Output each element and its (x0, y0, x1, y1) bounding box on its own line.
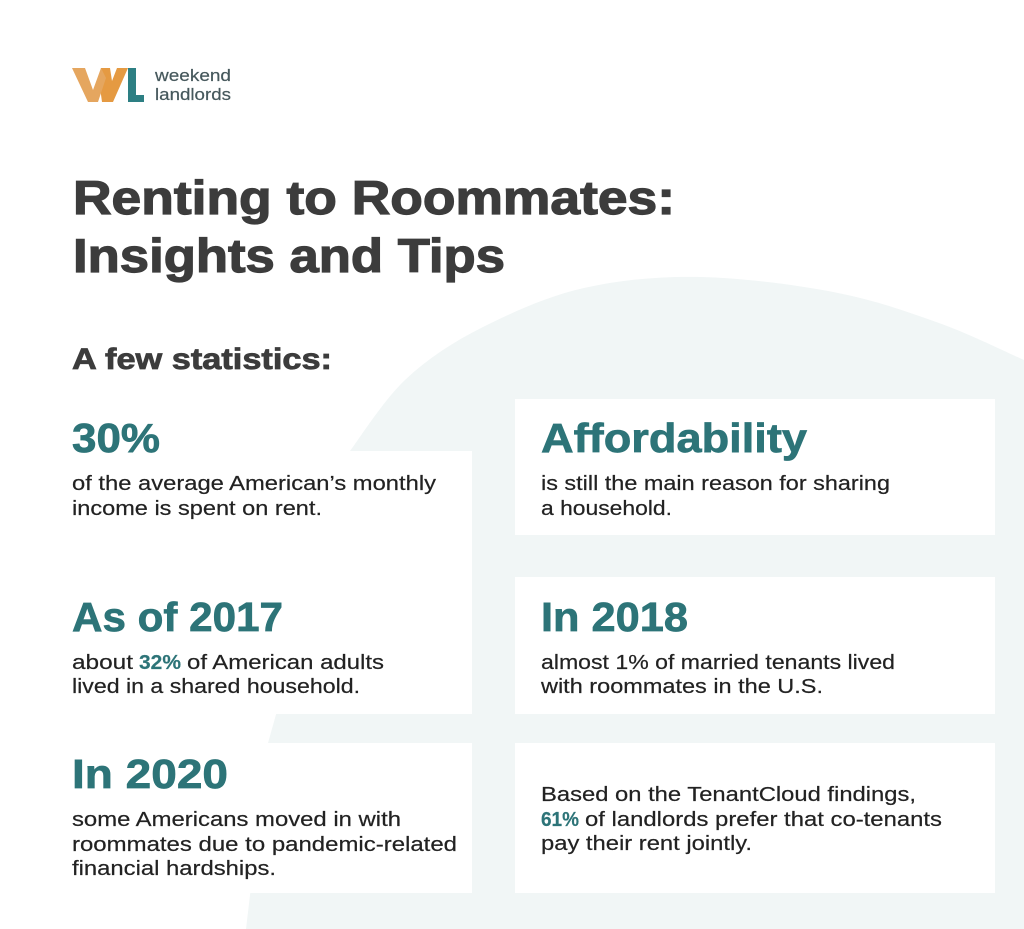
panel: as of 2017: about (72, 651, 133, 674)
logo (72, 67, 231, 104)
panel: 30% of income (0, 415, 472, 714)
background blob (246, 277, 1024, 929)
panel: tenantcloud findings: of landlords prefer that co-tenants (585, 808, 942, 831)
panel: as of 2017: As of 2017 (72, 594, 283, 640)
panel: 30% of income: income is spent on rent. (72, 497, 322, 520)
panel: in 2020: financial hardships. (72, 857, 276, 880)
panel: affordability: Affordability (541, 415, 807, 461)
panel: affordability: is still the main reason for sharing (541, 472, 890, 495)
panel: tenantcloud findings: pay their rent jointly. (541, 832, 752, 855)
panel: in 2018 (515, 577, 995, 714)
panel: tenantcloud findings (515, 743, 995, 893)
panel: affordability (515, 399, 995, 535)
panel: as of 2017 (72, 594, 384, 698)
panel: in 2018: almost 1% of married tenants lived (541, 651, 895, 674)
title: Renting to Roommates: (73, 171, 675, 224)
panel: tenantcloud findings: Based on the TenantCloud findings, (541, 783, 916, 806)
panel: in 2020: In 2020 (72, 751, 228, 797)
panel: as of 2017: 32% (139, 651, 181, 674)
panel: in 2020: some Americans moved in with (72, 808, 401, 831)
panel: in 2018: In 2018 (541, 594, 688, 640)
panel: tenantcloud findings: 61% (541, 808, 579, 831)
title: Insights and Tips (73, 229, 505, 282)
logo wordmark: landlords (155, 86, 231, 104)
panel: in 2018: with roommates in the U.S. (540, 675, 823, 698)
panel: 30% of income: 30% (72, 415, 160, 461)
panel: in 2020: roommates due to pandemic-related (72, 833, 457, 856)
panel: 30% of income: of the average American’s monthly (72, 472, 437, 495)
panel: in 2020 (0, 743, 472, 893)
panel: as of 2017: of American adults (187, 651, 384, 674)
logo wordmark: weekend (154, 67, 231, 85)
logo mark: WL (72, 68, 144, 102)
title (73, 171, 675, 282)
section heading: A few statistics: (72, 343, 332, 376)
panel: as of 2017: lived in a shared household. (72, 675, 360, 698)
logo wordmark (154, 67, 231, 104)
panel: affordability: a household. (541, 497, 672, 520)
